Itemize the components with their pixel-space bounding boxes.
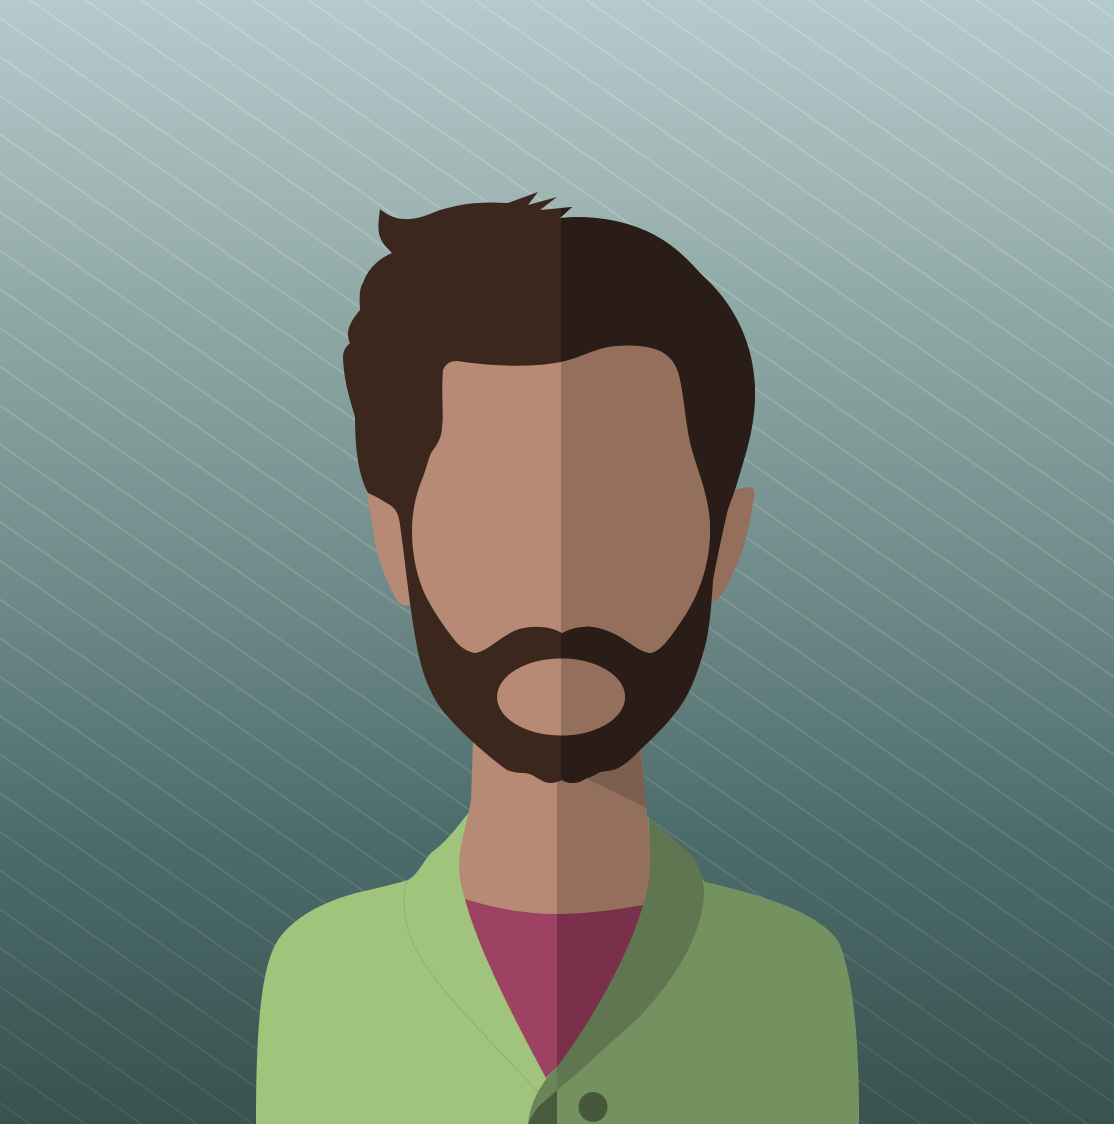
sweater (256, 812, 859, 1124)
sweater button (578, 1092, 608, 1122)
hair and beard (343, 192, 755, 783)
sweater collar: right (557, 817, 704, 1090)
face (412, 346, 710, 653)
neck shadow under beard (587, 745, 647, 808)
ear: left (366, 488, 410, 605)
t-shirt (465, 899, 643, 1078)
chin patch (497, 658, 625, 736)
sweater lapel strip (528, 1067, 557, 1124)
ear: right (700, 487, 755, 603)
sweater collar seam: left (404, 880, 538, 1092)
sweater lapel overlap (528, 1090, 557, 1124)
neck (459, 740, 650, 914)
